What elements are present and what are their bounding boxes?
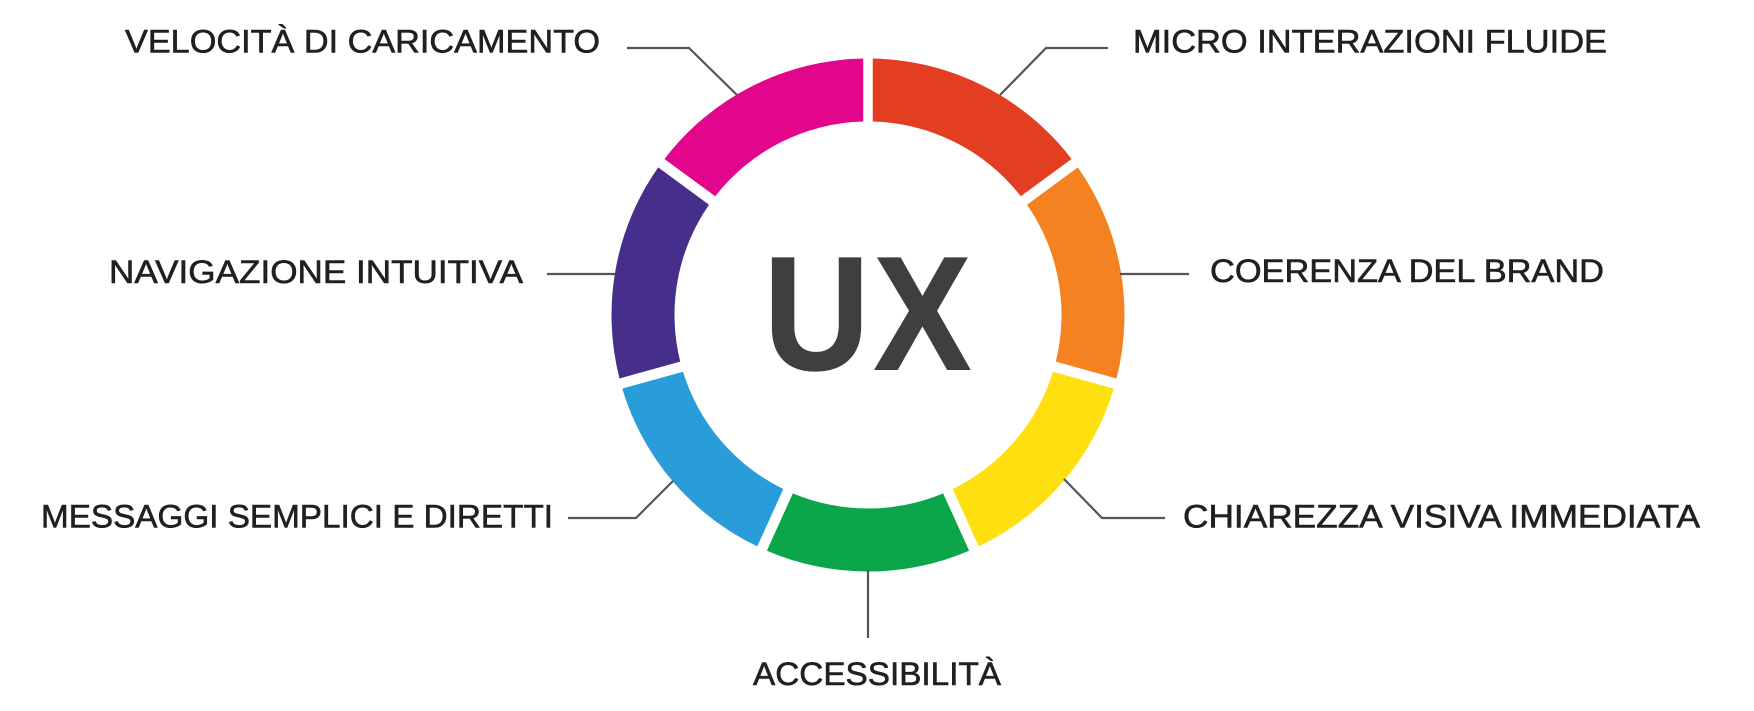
label: messaggi semplici e diretti: MESSAGGI SEMPLICI E DIRETTI [41, 498, 553, 534]
label: accessibilita: ACCESSIBILITÀ [753, 656, 1002, 692]
label: chiarezza visiva immediata: CHIAREZZA VISIVA IMMEDIATA [1183, 498, 1701, 534]
leader line: velocita di caricamento [627, 48, 737, 95]
center title UX: U [764, 223, 869, 404]
center title UX: X [874, 223, 971, 404]
segment: accessibilita (green) [767, 493, 969, 572]
label: coerenza del brand: COERENZA DEL BRAND [1210, 253, 1604, 289]
segment: micro interazioni fluide (red) [873, 59, 1072, 196]
leader line: chiarezza visiva immediata [1064, 479, 1165, 518]
segment: velocita di caricamento (magenta) [664, 59, 863, 196]
leader line: messaggi semplici e diretti [568, 481, 673, 518]
segment: chiarezza visiva immediata (yellow) [953, 372, 1114, 546]
leader line: coerenza del brand [1120, 273, 1189, 275]
label: velocita di caricamento: VELOCITÀ DI CARICAMENTO [125, 24, 600, 60]
ring diagram [612, 59, 1124, 572]
segment: navigazione intuitiva (purple) [612, 167, 709, 378]
segment: messaggi semplici e diretti (blue) [622, 372, 783, 546]
label: micro interazioni fluide: MICRO INTERAZIONI FLUIDE [1133, 24, 1607, 60]
leader line: micro interazioni fluide [1000, 48, 1108, 95]
center title UX [764, 223, 971, 404]
leader line: accessibilita [867, 570, 869, 638]
label: navigazione intuitiva: NAVIGAZIONE INTUITIVA [109, 254, 524, 290]
segment: coerenza del brand (orange) [1027, 167, 1124, 378]
leader line: navigazione intuitiva [547, 273, 615, 275]
